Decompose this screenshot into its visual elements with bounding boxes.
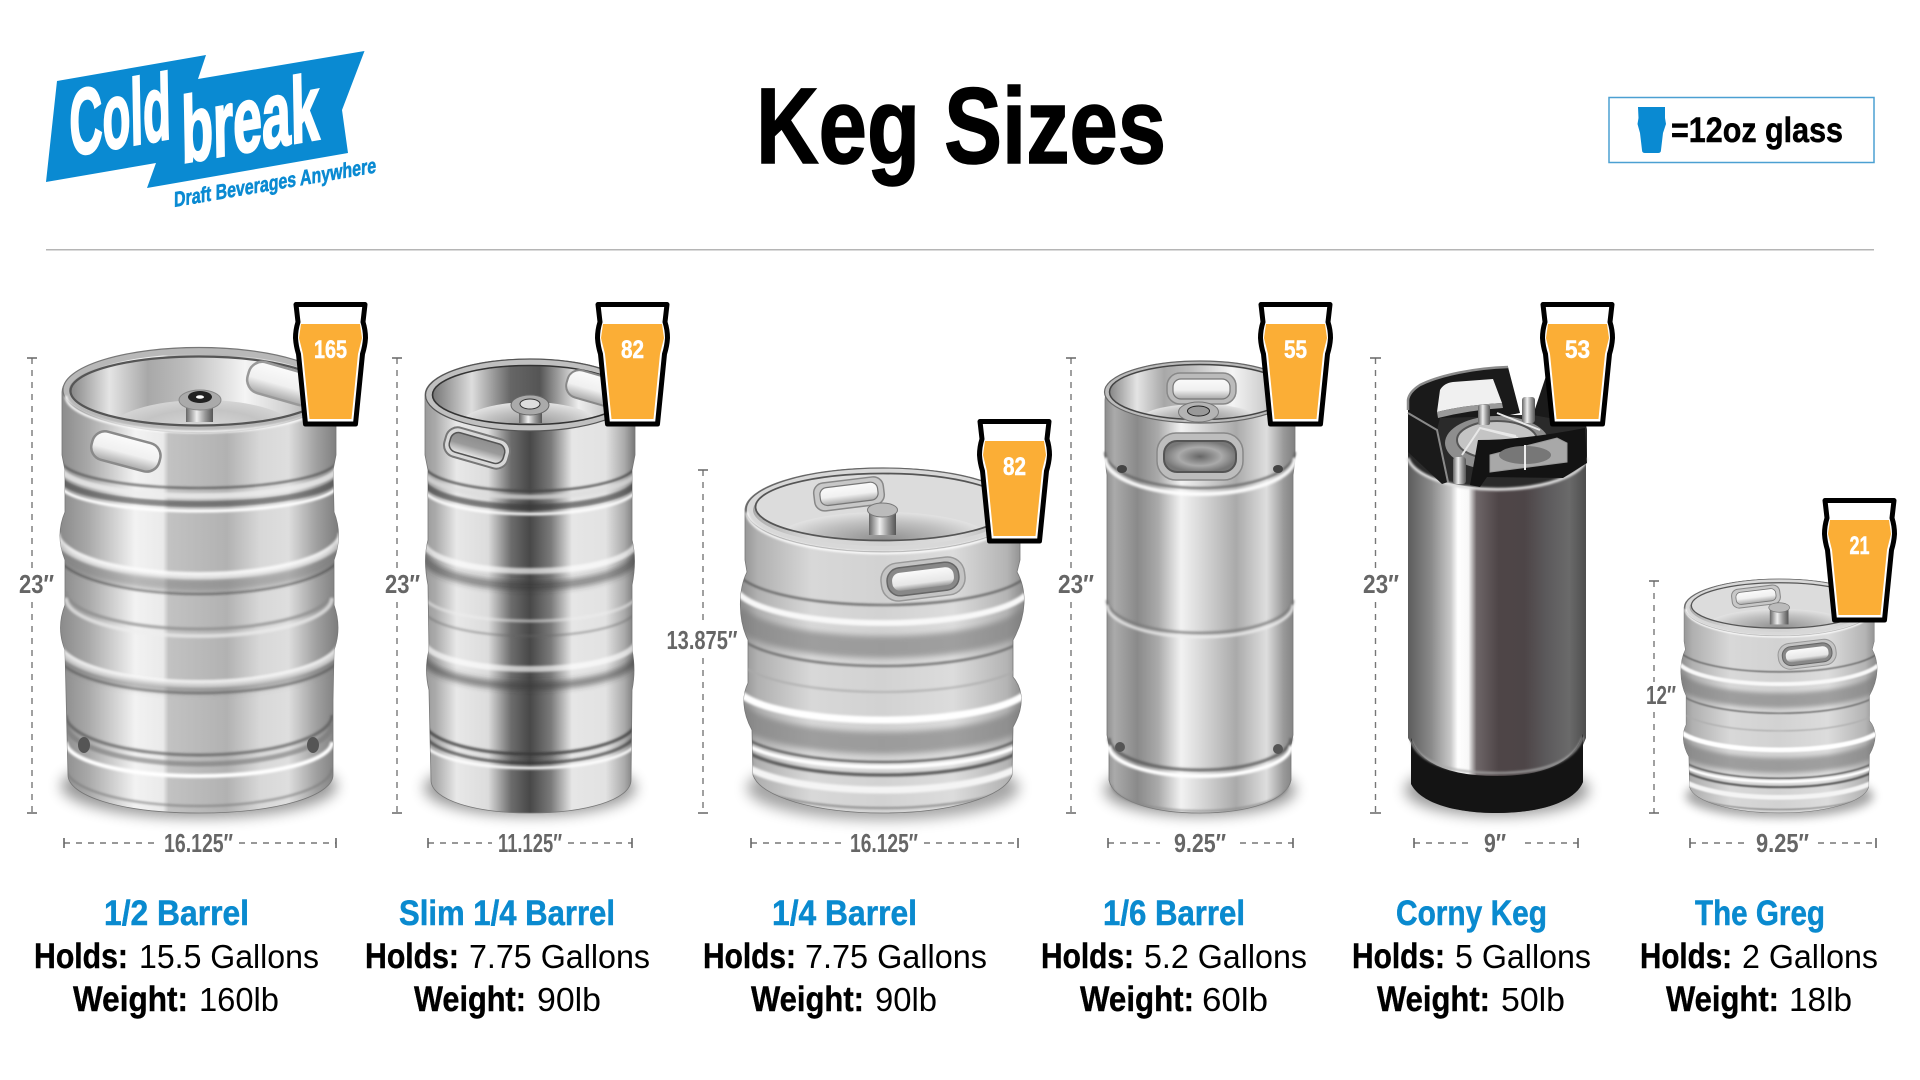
specs: The Greg: The Greg — [1695, 894, 1825, 933]
height dimension — [666, 470, 738, 813]
specs: Corny Keg — [1352, 894, 1591, 1019]
specs: 1/6 Barrel — [1041, 894, 1307, 1019]
specs: Slim 1/4 Barrel — [365, 894, 650, 1019]
specs: The Greg — [1640, 894, 1878, 1019]
rear handle — [813, 476, 885, 512]
specs: Slim 1/4 Barrel: 7.75 Gallons — [469, 938, 650, 975]
specs: The Greg: 2 Gallons — [1742, 938, 1878, 975]
specs: Corny Keg: Holds: — [1352, 937, 1445, 976]
specs: 1/2 Barrel: 1/2 Barrel — [104, 894, 249, 933]
keg posts — [1453, 397, 1535, 484]
front handle — [1157, 433, 1243, 480]
keg: 1/6 barrel — [1104, 361, 1296, 816]
pint glass: 55: 55 — [1284, 336, 1307, 364]
specs: 1/4 Barrel: 7.75 Gallons — [805, 938, 987, 975]
front handle — [88, 428, 163, 475]
width dimension: 16.125″ — [164, 828, 233, 858]
column: 1/2 Barrel — [19, 304, 366, 1019]
specs: The Greg: 18lb — [1789, 981, 1852, 1018]
width dimension — [1414, 828, 1578, 858]
logo: Coldbreak — [46, 51, 376, 212]
logo tagline: Draft Beverages Anywhere — [174, 154, 376, 212]
logo wordmark — [69, 54, 321, 183]
rear handle — [1167, 373, 1236, 404]
height dimension — [1058, 358, 1094, 813]
keg: 1/2 barrel — [56, 348, 342, 818]
specs: 1/2 Barrel: 160lb — [199, 981, 279, 1018]
keg: the greg — [1677, 579, 1882, 818]
pint glass: 53 — [1542, 304, 1612, 424]
height dimension — [19, 358, 54, 813]
divider — [46, 249, 1874, 250]
height dimension: 23″ — [1058, 569, 1094, 599]
column: 1/6 Barrel — [1041, 304, 1330, 1019]
pint glass: 82 — [598, 304, 668, 424]
height dimension — [1646, 581, 1676, 813]
pint glass: 165: 165 — [314, 336, 347, 364]
height dimension: 23″ — [19, 569, 54, 599]
specs: Corny Keg: 5 Gallons — [1455, 938, 1591, 975]
height dimension: 13.875″ — [666, 625, 738, 655]
specs: 1/6 Barrel: 1/6 Barrel — [1103, 894, 1245, 933]
valve — [179, 390, 221, 422]
logo banner — [46, 51, 364, 188]
icon: blue glass — [1638, 107, 1666, 153]
rear handle — [1408, 367, 1520, 430]
title: Keg Sizes — [756, 65, 1166, 186]
legend: 12oz glass — [1609, 98, 1874, 162]
specs: 1/4 Barrel: 1/4 Barrel — [772, 894, 917, 933]
pint glass: 82: 82 — [621, 336, 644, 364]
specs: Corny Keg: Corny Keg — [1396, 894, 1547, 933]
specs: 1/4 Barrel: 90lb — [875, 981, 937, 1018]
width dimension: 11.125″ — [498, 828, 562, 858]
width dimension: 9.25″ — [1174, 828, 1226, 858]
specs: 1/4 Barrel: Holds: — [703, 937, 796, 976]
specs: Slim 1/4 Barrel: Slim 1/4 Barrel — [399, 894, 615, 933]
specs: 1/6 Barrel: 60lb — [1202, 981, 1268, 1018]
valve — [1178, 402, 1218, 422]
height dimension: 23″ — [1363, 569, 1399, 599]
logo wordmark: break — [181, 54, 321, 183]
column: 1/4 Barrel — [666, 422, 1050, 1019]
specs: 1/4 Barrel: Weight: — [751, 980, 864, 1019]
pint glass: 21 — [1824, 500, 1894, 620]
rear handle — [244, 359, 320, 409]
specs: Corny Keg: 50lb — [1501, 981, 1565, 1018]
height dimension: 12″ — [1646, 680, 1676, 710]
specs: Slim 1/4 Barrel: Holds: — [365, 937, 459, 976]
legend text: =12oz glass — [1671, 111, 1843, 150]
base — [1411, 734, 1583, 813]
metal centre — [1445, 416, 1549, 470]
specs: Corny Keg: Weight: — [1377, 980, 1490, 1019]
valve — [511, 395, 549, 423]
keg: 1/4 barrel — [735, 468, 1031, 820]
front handle — [879, 555, 967, 603]
valve — [868, 503, 898, 535]
specs: 1/6 Barrel: Holds: — [1041, 937, 1134, 976]
width dimension — [428, 828, 632, 858]
column: Corny Keg — [1352, 304, 1612, 1019]
rear handle — [563, 367, 629, 411]
specs: 1/2 Barrel: Holds: — [34, 937, 128, 976]
height dimension — [385, 358, 420, 813]
specs: The Greg: Holds: — [1640, 937, 1732, 976]
specs: Slim 1/4 Barrel: Weight: — [414, 980, 526, 1019]
specs: 1/2 Barrel — [34, 894, 319, 1019]
width dimension: 9″ — [1484, 828, 1506, 858]
front handle — [441, 424, 513, 472]
pint glass: 53: 53 — [1565, 336, 1590, 364]
rubber front — [1408, 413, 1448, 484]
width dimension — [1108, 828, 1293, 858]
specs: 1/6 Barrel: 5.2 Gallons — [1144, 938, 1307, 975]
specs: 1/2 Barrel: Weight: — [73, 980, 188, 1019]
pint glass: 82 — [980, 422, 1050, 541]
keg: corny keg — [1405, 367, 1589, 816]
width dimension: 16.125″ — [850, 828, 918, 858]
keg: slim 1/4 barrel — [423, 359, 637, 816]
height dimension — [1363, 358, 1399, 813]
width dimension — [751, 828, 1018, 858]
width dimension: 9.25″ — [1756, 828, 1809, 858]
height dimension: 23″ — [385, 569, 420, 599]
specs: The Greg: Weight: — [1666, 980, 1779, 1019]
pint glass: 165 — [296, 304, 366, 424]
collar — [1408, 412, 1587, 488]
width dimension — [64, 828, 336, 858]
logo wordmark: Cold — [69, 54, 172, 176]
width dimension — [1690, 828, 1876, 858]
pint glass: 21: 21 — [1850, 532, 1870, 560]
pint glass: 55 — [1260, 304, 1330, 424]
specs: Slim 1/4 Barrel: 90lb — [537, 981, 601, 1018]
specs: 1/4 Barrel — [703, 894, 987, 1019]
pint glass: 82: 82 — [1003, 453, 1026, 481]
column: Slim 1/4 Barrel — [365, 304, 668, 1019]
specs: 1/6 Barrel: Weight: — [1080, 980, 1194, 1019]
column: The Greg — [1640, 500, 1894, 1019]
specs: 1/2 Barrel: 15.5 Gallons — [139, 938, 319, 975]
